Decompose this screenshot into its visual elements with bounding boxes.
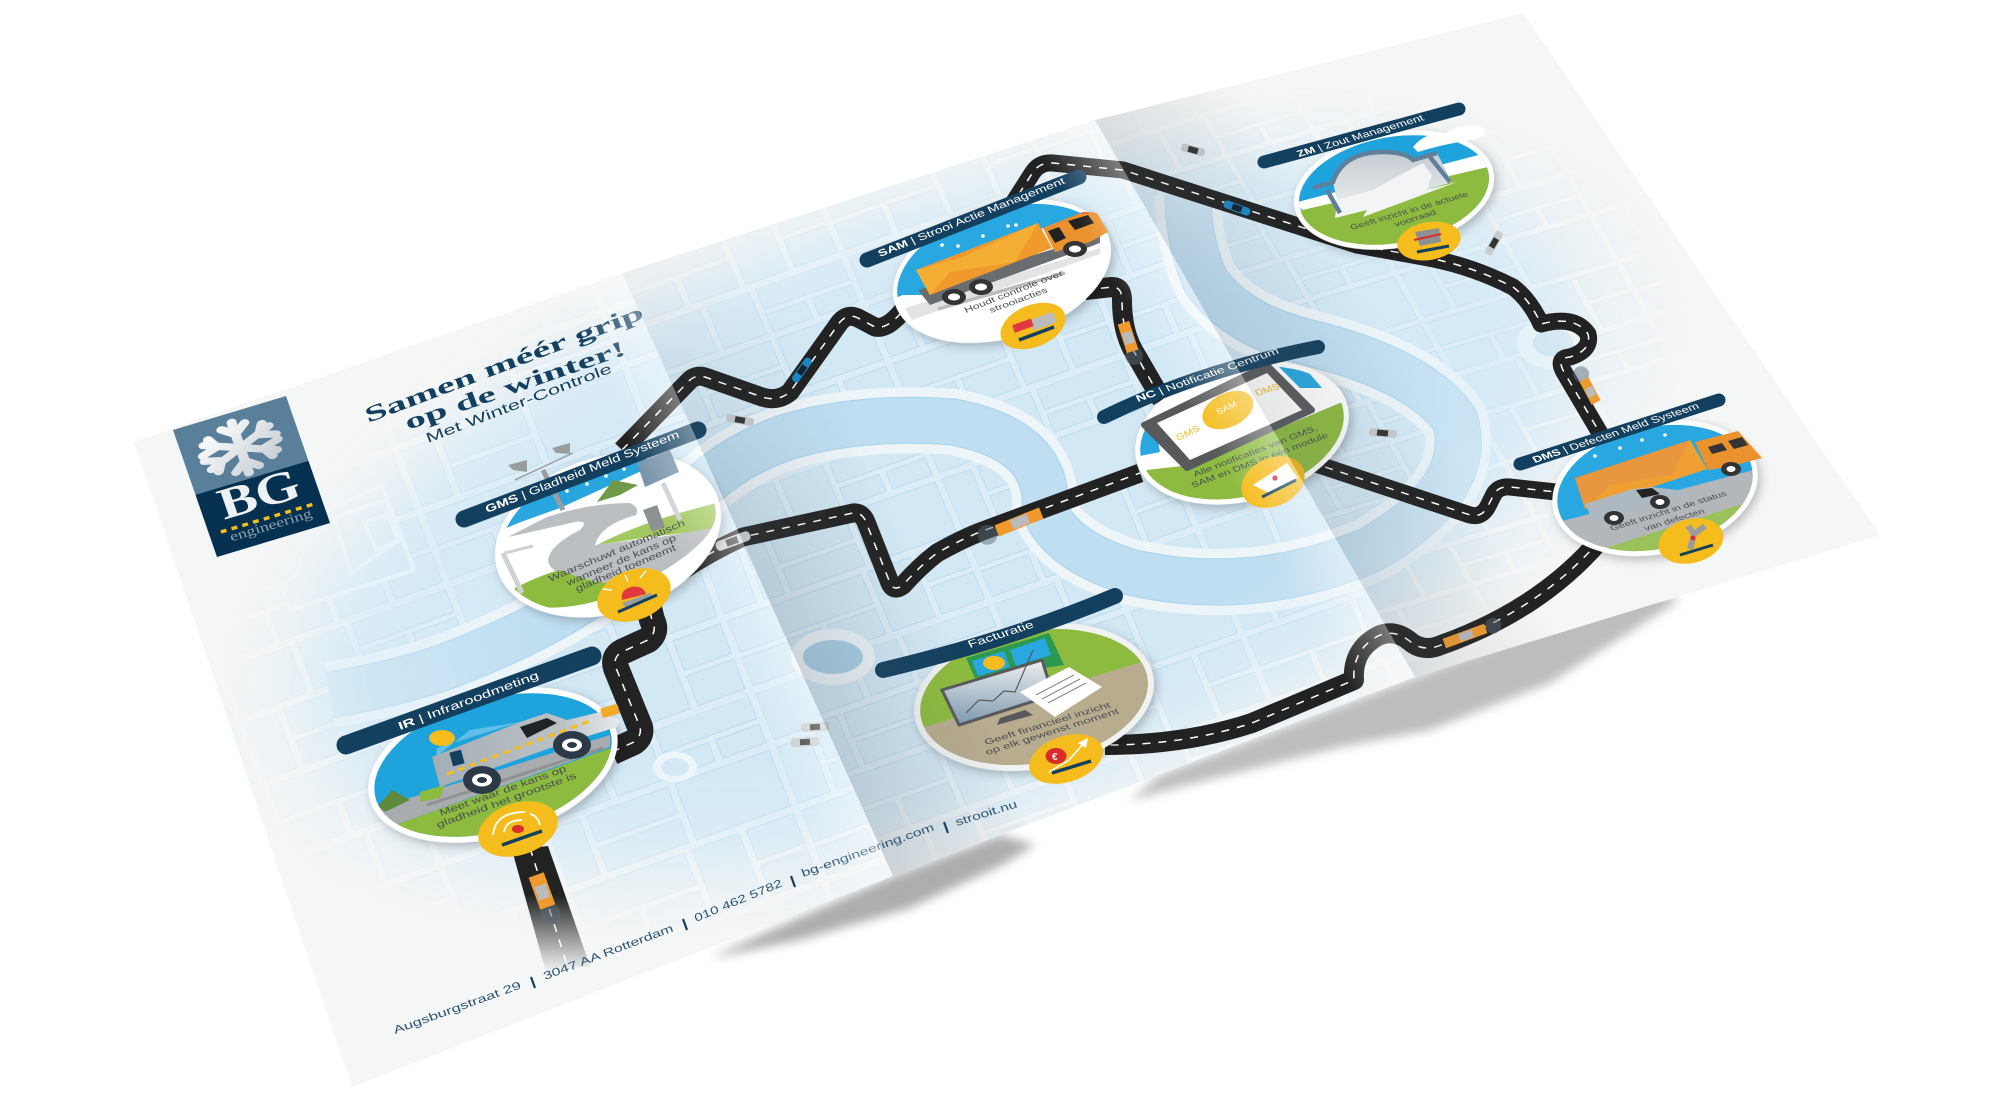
description: gladheid het grootste is <box>435 771 579 831</box>
panel: GMS <box>456 422 728 626</box>
road: start, fading out <box>512 846 590 972</box>
panel: Facturatie: Facturatie <box>966 620 1036 651</box>
road: SAM to NC <box>1085 287 1162 400</box>
title <box>361 299 646 447</box>
icon: salt silo <box>1394 217 1464 265</box>
icon: euro growth: € <box>1052 752 1058 763</box>
description: Alle notificaties van GMS, <box>1192 424 1319 479</box>
road: DMS to Facturatie <box>1105 540 1600 745</box>
illustration: road with sensors <box>506 458 716 608</box>
description: Houdt controle over <box>963 269 1065 315</box>
footer contact line: strooit.nu <box>954 799 1019 829</box>
illustration: tablet <box>1140 366 1344 500</box>
icon: snowflake <box>195 411 286 484</box>
panel: ZM: ZM | Zout Management <box>1295 113 1426 159</box>
label pill <box>1520 400 1719 464</box>
panel: Facturatie <box>883 596 1166 793</box>
footer contact line: bg-engineering.com <box>800 822 936 880</box>
description: voorraad <box>1392 208 1438 229</box>
road: GMS to NC <box>680 473 1140 588</box>
description <box>1190 424 1330 490</box>
fold shading <box>583 96 1510 876</box>
description: gladheid toeneemt <box>574 543 678 595</box>
description: van defecten <box>1642 507 1706 532</box>
city map background <box>256 114 1644 914</box>
panel: NC: GMS <box>1175 424 1202 443</box>
illustration: infrared van <box>374 693 612 837</box>
footer contact line: 010 462 5782 <box>693 878 784 925</box>
panel: ZM <box>1264 109 1504 265</box>
logo: BG engineering <box>173 396 330 557</box>
description: Geeft inzicht in de status <box>1608 489 1729 532</box>
label pill <box>883 596 1115 670</box>
description: Waarschuwt automatisch <box>547 518 687 585</box>
title: op de winter! <box>401 335 629 434</box>
description: Geeft inzicht in de actuele <box>1348 190 1470 232</box>
label pill <box>1264 109 1459 162</box>
icon: wrench <box>1654 512 1728 570</box>
logo: BG engineering: engineering <box>228 506 315 544</box>
panel: NC: NC | Notificatie Centrum <box>1134 346 1281 404</box>
road: GMS to SAM <box>622 308 905 450</box>
river <box>330 195 1458 695</box>
title: Samen méér grip <box>361 299 646 427</box>
panel: DMS <box>1520 400 1770 574</box>
icon: euro growth <box>1023 725 1109 793</box>
footer contact line: 3047 AA Rotterdam <box>542 923 675 983</box>
description: op elk gewenst moment <box>983 707 1121 757</box>
footer contact line <box>392 799 1019 1037</box>
description <box>982 700 1121 757</box>
football pitch <box>285 499 416 606</box>
description: strooiacties <box>988 285 1050 315</box>
road: NC to DMS <box>1310 462 1556 516</box>
description <box>547 518 687 595</box>
label pill <box>346 656 592 745</box>
icon: beacon <box>590 559 678 631</box>
road: IR to GMS <box>612 604 654 752</box>
icon: plough truck <box>994 294 1072 358</box>
description: SAM en DMS in één module <box>1190 431 1330 490</box>
illustration: gritter truck <box>897 204 1100 320</box>
panel: GMS: GMS | Gladheid Meld Systeem <box>484 429 681 516</box>
panel: IR: IR | Infraroodmeting <box>397 670 541 733</box>
panel: NC: DMS <box>1253 382 1282 398</box>
icon: infrared sensor <box>471 792 565 866</box>
trucks on the road <box>527 320 1603 926</box>
wordmark: BG <box>212 460 307 530</box>
panel: NC: SAM <box>1215 399 1238 417</box>
panel: NC <box>1104 339 1365 527</box>
description: wanneer de kans op <box>564 533 678 589</box>
panel: IR <box>346 656 640 869</box>
roundabouts <box>653 317 1589 782</box>
description <box>435 764 579 831</box>
cars <box>714 143 1504 747</box>
illustration: monitor and invoice <box>920 629 1148 765</box>
illustration: salt dome <box>1299 135 1489 245</box>
panel: SAM <box>867 174 1129 368</box>
brochure shadows <box>710 590 1680 958</box>
illustration: truck and van <box>1557 424 1753 552</box>
description: Meet waar de kans op <box>438 764 568 819</box>
description: Geeft financieel inzicht <box>982 700 1113 747</box>
label pill <box>867 177 1079 260</box>
icon: envelope <box>1233 446 1313 518</box>
road: SAM over ZM to DMS <box>1010 163 1604 440</box>
label pill <box>464 430 698 519</box>
panel: SAM: SAM | Strooi Actie Management <box>876 176 1067 259</box>
panel: DMS: DMS | Defecten Meld Systeem <box>1531 401 1702 465</box>
footer contact line: Augsburgstraat 29 <box>392 980 523 1037</box>
title: Met Winter-Controle <box>424 361 614 447</box>
label pill <box>1104 347 1318 417</box>
